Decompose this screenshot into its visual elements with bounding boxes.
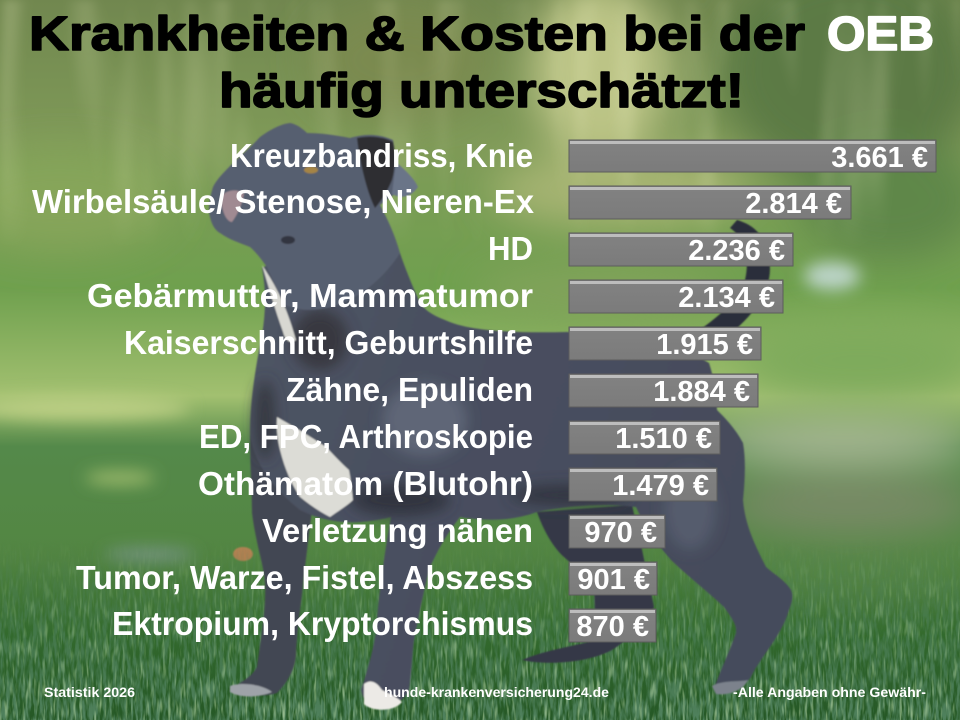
title accent OEB: OEB <box>827 8 934 61</box>
bar: Zähne 1.884 <box>569 374 758 408</box>
bar: Wirbelsäule 2.814 <box>569 186 851 220</box>
dog body shading <box>255 310 716 550</box>
category labels: ED, FPC, Arthroskopie <box>199 418 533 455</box>
bar: HD 2.236 <box>569 233 793 267</box>
fallen leaf <box>233 547 253 561</box>
category labels: Verletzung nähen <box>262 512 533 549</box>
category labels: Zähne, Epuliden <box>286 371 533 408</box>
dog back paw <box>230 684 272 696</box>
bar: Wirbelsäule 2.814: 2.814 € <box>745 188 842 220</box>
bar: ED FPC 1.510 <box>569 421 720 455</box>
dog far front leg <box>231 430 312 696</box>
title <box>29 8 934 118</box>
bar: Gebärmutter 2.134: 2.134 € <box>678 282 775 314</box>
dog hind paw <box>712 680 748 694</box>
dog chest patch <box>277 417 353 517</box>
bar chart <box>569 140 936 643</box>
title line 1: Krankheiten & Kosten bei der <box>29 8 805 61</box>
bar: ED FPC 1.510: 1.510 € <box>615 423 712 455</box>
footer: year: Statistik 2026 <box>44 684 135 700</box>
bar: Kreuzbandriss 3.661: 3.661 € <box>831 142 928 174</box>
bar: Othämatom 1.479: 1.479 € <box>612 470 709 502</box>
category labels <box>32 137 535 642</box>
category labels: Othämatom (Blutohr) <box>198 465 533 502</box>
bar: Zähne 1.884: 1.884 € <box>653 376 750 408</box>
category labels: Kreuzbandriss, Knie <box>230 137 533 174</box>
category labels: HD <box>488 230 533 267</box>
dog body <box>250 205 792 707</box>
footer: disclaimer: -Alle Angaben ohne Gewähr- <box>733 684 926 700</box>
category labels: Kaiserschnitt, Geburtshilfe <box>124 324 533 361</box>
dog tail <box>692 220 770 352</box>
bar: Othämatom 1.479 <box>569 468 717 502</box>
bar: Verletzung 970: 970 € <box>584 517 657 549</box>
bar: Ektropium 870: 870 € <box>576 611 649 643</box>
footer notes <box>44 684 926 700</box>
dog far hind leg <box>522 505 654 663</box>
bar: Gebärmutter 2.134 <box>569 280 783 314</box>
dog eye <box>304 166 318 174</box>
title line 2: häufig unterschätzt! <box>219 65 744 118</box>
dog ear <box>357 137 395 208</box>
category labels: Tumor, Warze, Fistel, Abszess <box>76 559 533 596</box>
bar: Kaiserschnitt 1.915: 1.915 € <box>656 329 753 361</box>
category labels: Ektropium, Kryptorchismus <box>112 605 533 642</box>
dog photo subject <box>209 123 792 710</box>
bar: Kaiserschnitt 1.915 <box>569 327 761 361</box>
dog ear flap <box>392 162 418 197</box>
category labels: Wirbelsäule/ Stenose, Nieren-Ex <box>32 183 535 220</box>
dog white paw <box>364 682 402 710</box>
dog closed mouth shade <box>281 236 295 244</box>
bar: HD 2.236: 2.236 € <box>688 235 785 267</box>
category labels: Gebärmutter, Mammatumor <box>87 277 533 314</box>
dog throat patch <box>262 265 296 342</box>
dog head <box>209 123 400 310</box>
footer: website: hunde-krankenversicherung24.de <box>384 684 609 700</box>
bar: Kreuzbandriss 3.661 <box>569 140 936 174</box>
dog nose <box>222 190 244 222</box>
bar: Tumor 901: 901 € <box>577 564 650 596</box>
